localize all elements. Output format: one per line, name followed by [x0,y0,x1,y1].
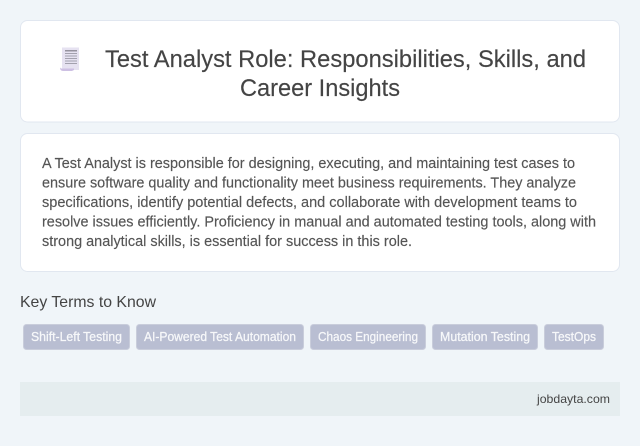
text block: description: resolve issues efficiently. Proficiency in manual and automated testing tools, along with [42,214,596,230]
tag: Shift-Left Testing [24,324,130,350]
tag: Shift-Left Testing: Shift-Left Testing [31,330,122,344]
footer bar [20,382,620,416]
tag: AI-Powered Test Automation: AI-Powered Test Automation [144,330,296,344]
tag: AI-Powered Test Automation [136,324,304,350]
text block: description: ensure software quality and functionality meet business requirements. They analyze [42,176,576,192]
tag: Mutation Testing [432,324,538,350]
tags: key terms list [24,324,604,350]
title [105,46,586,102]
footer source text: jobdayta.com [536,392,610,406]
tag: TestOps [544,324,604,350]
text block: description: A Test Analyst is responsible for designing, executing, and maintaining test cases to [42,156,575,172]
tag: Chaos Engineering [310,324,426,350]
panel: description card [20,134,620,272]
tag: Mutation Testing: Mutation Testing [440,330,530,344]
title: Test Analyst Role: Responsibilities, Skills, and [105,46,586,73]
text block: description: strong analytical skills, is essential for success in this role. [42,234,412,250]
heading: key terms: Key Terms to Know [20,294,156,311]
icon: document scroll [60,48,79,71]
panel: header card [20,20,620,122]
text block: description: specifications, identify potential defects, and collaborate with development teams to [42,195,577,211]
text block: description [42,156,596,250]
tag: Chaos Engineering: Chaos Engineering [318,330,418,344]
title: Career Insights [240,75,400,102]
tag: TestOps: TestOps [552,330,596,344]
